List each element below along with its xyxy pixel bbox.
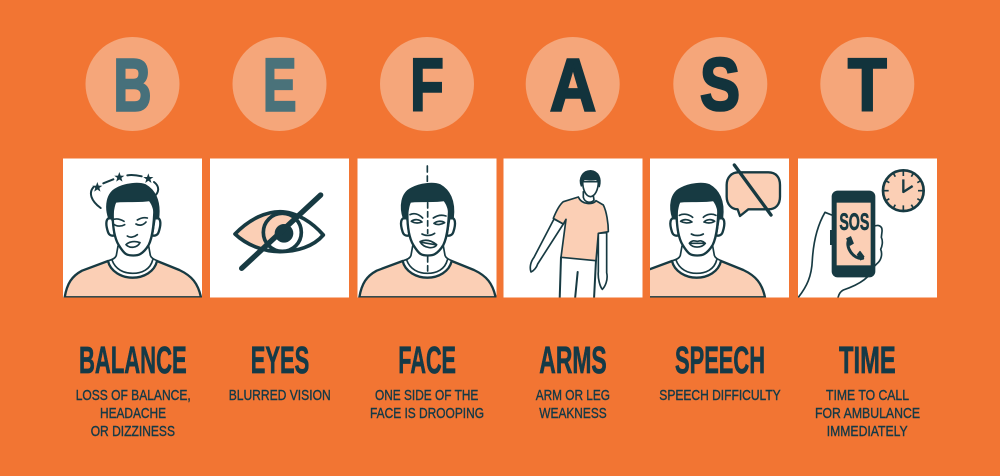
letter circle B: B bbox=[114, 44, 152, 126]
caption: time: TIME TO CALL bbox=[826, 387, 909, 404]
caption: arms: ARMS bbox=[539, 340, 607, 382]
letter circle A: A bbox=[550, 44, 596, 126]
icon: man with drooping face bbox=[359, 166, 496, 297]
caption: balance: BALANCE bbox=[79, 340, 187, 382]
caption: face: FACE bbox=[398, 340, 456, 382]
caption: arms bbox=[536, 340, 610, 422]
icon: dizzy man with stars bbox=[65, 172, 201, 297]
caption: eyes: BLURRED VISION bbox=[229, 387, 331, 404]
caption: time: IMMEDIATELY bbox=[827, 423, 908, 440]
caption: balance: HEADACHE bbox=[100, 405, 166, 422]
letter circle F: F bbox=[410, 44, 444, 126]
letter circle S bbox=[673, 37, 767, 131]
letter circle A bbox=[526, 37, 620, 131]
icon: crossed-out eye bbox=[230, 195, 323, 268]
letter circle E bbox=[232, 37, 326, 131]
caption: balance bbox=[76, 340, 191, 440]
caption: speech: SPEECH DIFFICULTY bbox=[659, 387, 781, 404]
caption: time: FOR AMBULANCE bbox=[815, 405, 920, 422]
panel: face bbox=[358, 158, 496, 298]
letter circle B bbox=[86, 37, 180, 131]
infographic: BE FAST bbox=[63, 37, 937, 436]
letter circle S: S bbox=[700, 43, 740, 126]
panel: eyes bbox=[210, 158, 349, 298]
caption: eyes: EYES bbox=[251, 340, 309, 382]
caption: balance: LOSS OF BALANCE, bbox=[76, 387, 191, 404]
caption: arms: ARM OR LEG bbox=[536, 387, 610, 404]
caption: arms: WEAKNESS bbox=[539, 405, 607, 422]
icon: man with weak arm bbox=[530, 171, 608, 299]
panel: arms bbox=[504, 158, 642, 299]
caption: time bbox=[815, 340, 920, 440]
caption: time: TIME bbox=[839, 340, 896, 382]
icon: hand holding phone with SOS and clock bbox=[798, 170, 924, 299]
letter circle T bbox=[820, 37, 914, 131]
panel: speech bbox=[650, 158, 789, 298]
caption: balance: OR DIZZINESS bbox=[91, 423, 175, 440]
letter circle T: T bbox=[848, 44, 887, 126]
letter circle E: E bbox=[263, 44, 296, 126]
caption: face: ONE SIDE OF THE bbox=[375, 387, 478, 404]
panel: balance bbox=[63, 158, 202, 298]
icon: man with crossed speech bubble bbox=[650, 163, 782, 298]
icon: hand holding phone with SOS and clock: SOS bbox=[839, 209, 869, 236]
caption: speech bbox=[659, 340, 781, 404]
caption: speech: SPEECH bbox=[675, 340, 765, 382]
panel: time bbox=[798, 158, 937, 299]
caption: face: FACE IS DROOPING bbox=[370, 405, 484, 422]
caption: eyes bbox=[229, 340, 331, 404]
letter circle F bbox=[380, 37, 474, 131]
caption: face bbox=[370, 340, 484, 422]
